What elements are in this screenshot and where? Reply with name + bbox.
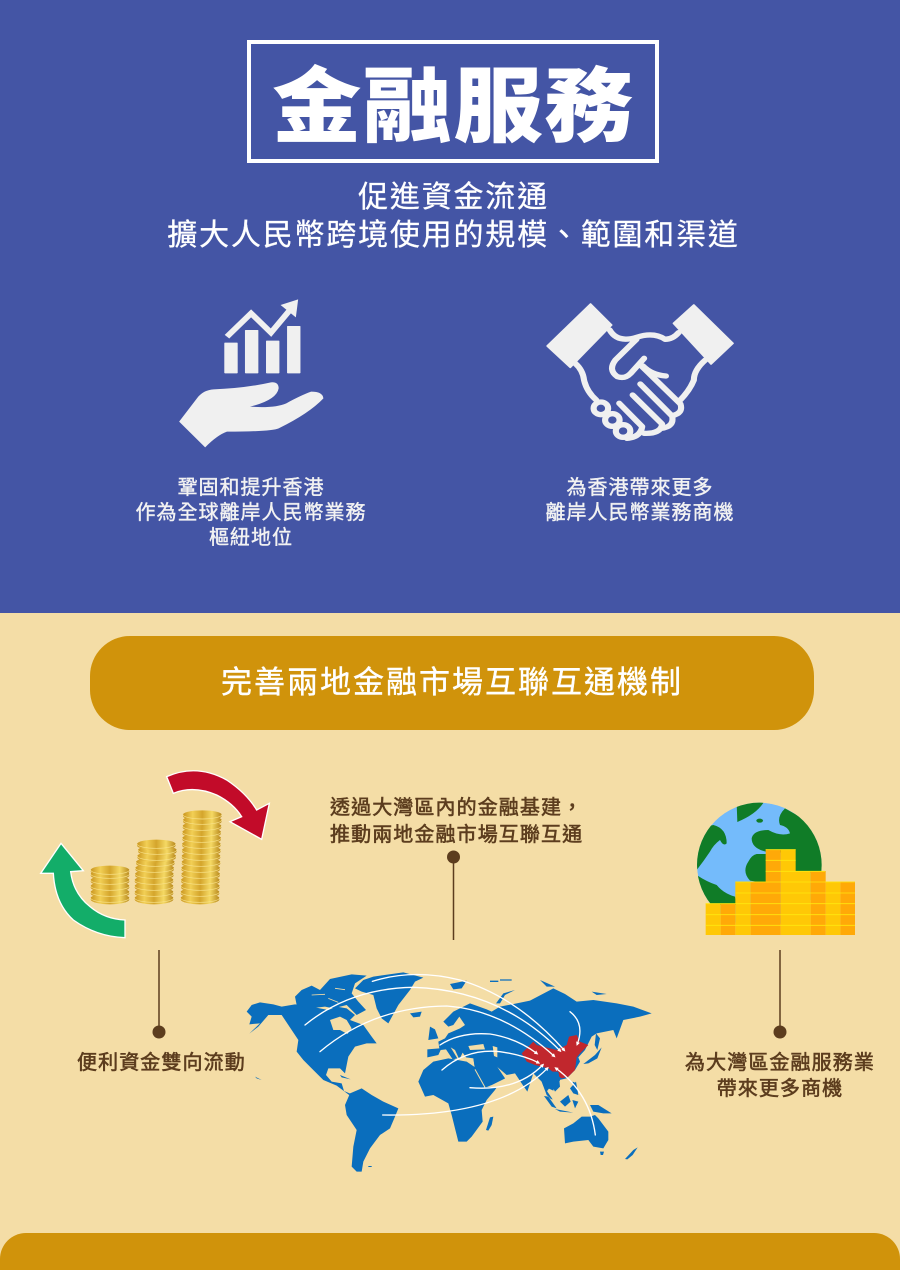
footer bar bbox=[0, 1233, 900, 1270]
North America and Greenland bbox=[247, 972, 423, 1096]
text: right note: 帶來更多商機 bbox=[717, 1078, 843, 1100]
text: centre note bbox=[330, 796, 583, 846]
coin stack small bbox=[91, 866, 129, 904]
globe bbox=[693, 800, 823, 927]
arrow: green bbox=[41, 843, 125, 938]
icon: hand holding rising chart bbox=[179, 299, 323, 447]
world map bbox=[247, 972, 652, 1172]
panel: blue header section bbox=[0, 0, 900, 613]
title box: 金融服務 bbox=[272, 62, 634, 153]
label: right benefit: 為香港帶來更多 bbox=[566, 477, 714, 499]
banner heading bbox=[90, 636, 814, 730]
icon: handshake bbox=[547, 304, 733, 438]
text: left note: 便利資金雙向流動 bbox=[77, 1052, 246, 1074]
coin stack medium bbox=[135, 840, 177, 904]
Eurasia bbox=[427, 979, 652, 1100]
label: right benefit bbox=[546, 476, 734, 524]
text: centre note: 透過大灣區內的金融基建， bbox=[330, 797, 583, 819]
connector: left bbox=[152, 950, 166, 1038]
label: left benefit: 鞏固和提升香港 bbox=[178, 477, 324, 499]
label: left benefit: 樞紐地位 bbox=[209, 527, 293, 549]
banner heading: 完善兩地金融市場互聯互通機制 bbox=[221, 665, 683, 700]
South America and Africa bbox=[340, 1058, 497, 1172]
icon: coin stacks with circular arrows bbox=[41, 771, 269, 938]
title box bbox=[247, 40, 659, 163]
Southeast Asia and Oceania bbox=[540, 1072, 638, 1159]
China highlight bbox=[522, 1035, 588, 1078]
gold blocks bbox=[706, 849, 855, 935]
subtitle: 擴大人民幣跨境使用的規模、範圍和渠道 bbox=[167, 219, 740, 252]
text: right note: 為大灣區金融服務業 bbox=[685, 1052, 875, 1074]
flow arcs bbox=[305, 974, 595, 1135]
subtitle bbox=[167, 181, 740, 252]
label: left benefit bbox=[136, 477, 366, 549]
label: left benefit: 作為全球離岸人民幣業務 bbox=[136, 502, 366, 524]
arrow: red bbox=[167, 771, 269, 839]
icon: globe with gold blocks bbox=[693, 800, 855, 935]
label: right benefit: 離岸人民幣業務商機 bbox=[546, 502, 734, 524]
text: right note bbox=[685, 1052, 875, 1100]
subtitle: 促進資金流通 bbox=[358, 181, 549, 214]
text: centre note: 推動兩地金融市場互聯互通 bbox=[330, 824, 583, 846]
connector: right bbox=[774, 950, 786, 1038]
connector: centre bbox=[447, 850, 460, 940]
coin stack tall bbox=[181, 810, 222, 904]
